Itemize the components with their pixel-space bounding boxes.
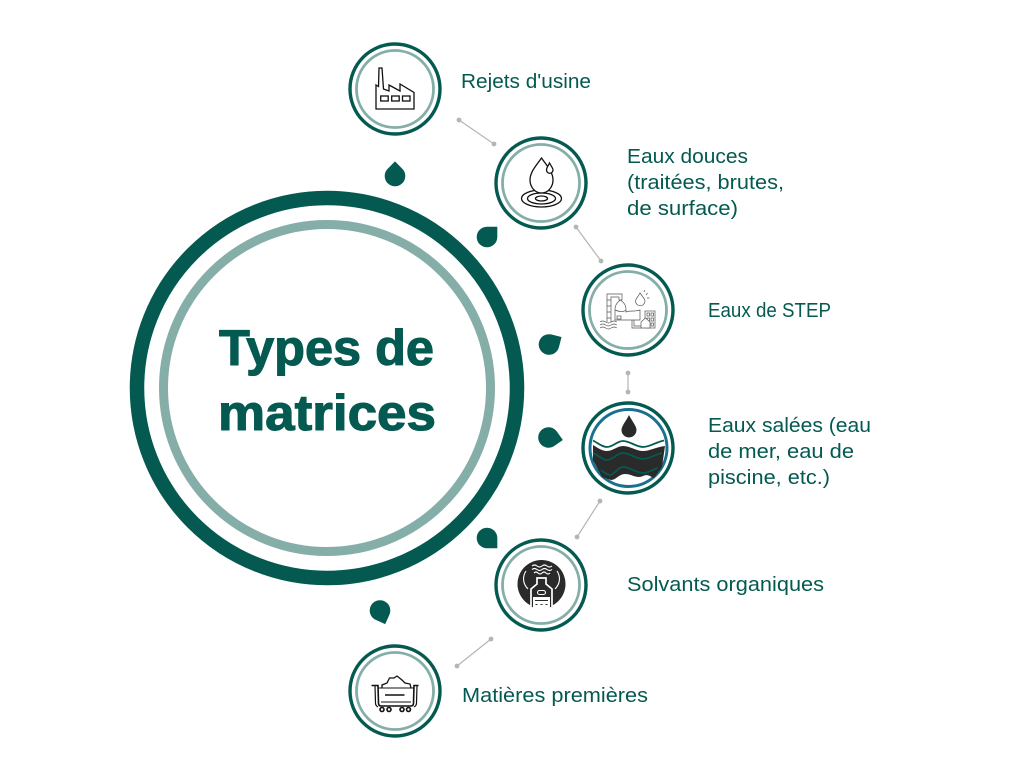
label: Eaux salees: Eaux salées (eau <box>708 415 871 437</box>
icon: drop and waves <box>593 415 665 480</box>
connector: usine to eaux douces <box>457 118 496 146</box>
label: Eaux de STEP: Eaux de STEP <box>708 300 831 322</box>
connector: solvants to matieres <box>455 637 493 668</box>
label: Eaux douces: de surface) <box>627 198 738 220</box>
badge: wastewater plant <box>583 265 673 355</box>
title <box>218 320 436 441</box>
connector: STEP to eaux salees <box>626 371 630 394</box>
label: Eaux salees: piscine, etc.) <box>708 467 830 489</box>
label: Matieres premieres: Matières premières <box>462 685 648 707</box>
connector: eaux douces to STEP <box>574 225 603 263</box>
icon: treatment plant <box>600 290 655 329</box>
title: matrices <box>218 385 436 441</box>
teardrop markers <box>366 161 563 624</box>
icon: factory <box>376 68 414 109</box>
icon: mine cart <box>372 676 418 712</box>
label: Eaux salees <box>708 415 871 489</box>
label: Eaux salees: de mer, eau de <box>708 441 854 463</box>
title: Types de <box>219 320 434 376</box>
label: Rejets d'usine: Rejets d'usine <box>461 71 591 93</box>
main circle <box>137 198 517 578</box>
badge: raw materials <box>350 646 440 736</box>
badge: organic solvents <box>496 540 586 630</box>
badge: fresh water <box>496 138 586 228</box>
label: Solvants organiques: Solvants organiques <box>627 574 824 596</box>
label: Eaux douces <box>627 146 784 220</box>
label: Eaux douces: Eaux douces <box>627 146 748 168</box>
badge: factory <box>350 44 440 134</box>
label: Eaux douces: (traitées, brutes, <box>627 172 784 194</box>
icon: solvent bottle <box>518 560 566 608</box>
icon: drop on ripples <box>522 158 562 207</box>
connector: eaux salees to solvants <box>575 499 602 539</box>
badge: salt water <box>583 403 673 493</box>
